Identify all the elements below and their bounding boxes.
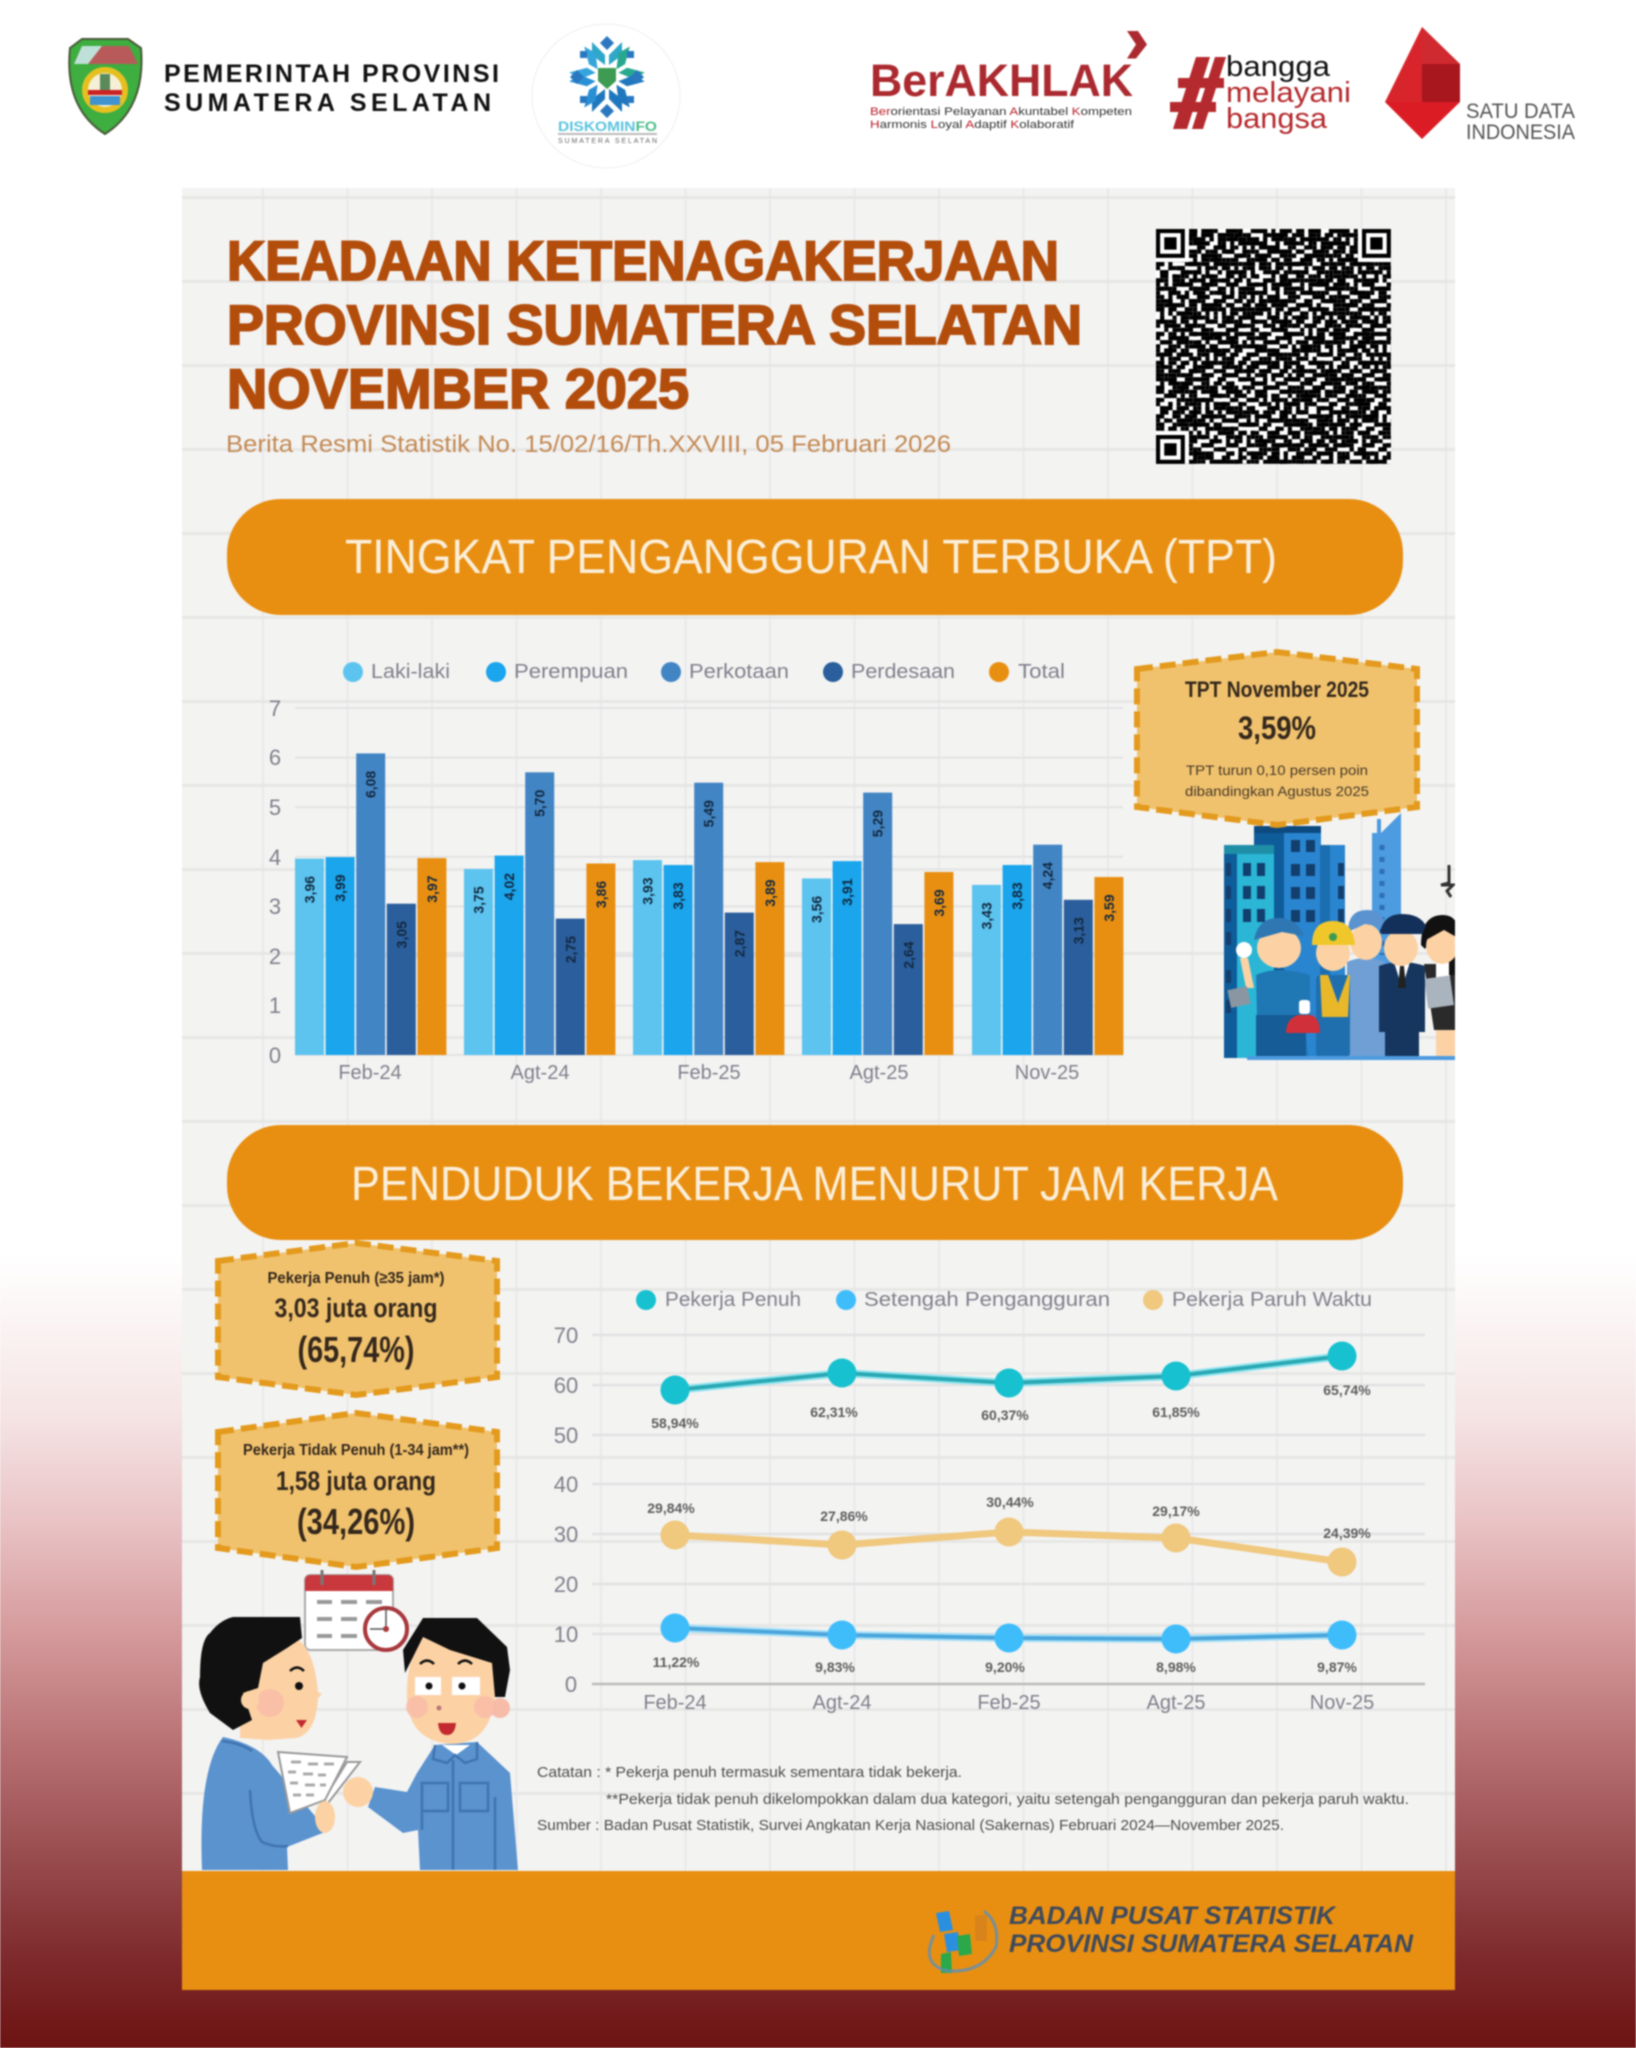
logo: Pemerintah Provinsi Sumatera Selatan: PEMERINTAH PROVINSI	[164, 60, 499, 88]
y axis labels: 6	[269, 745, 281, 770]
y axis labels: 7	[269, 696, 281, 721]
x axis labels: Feb-24	[338, 1062, 402, 1084]
notes and source: Sumber : Badan Pusat Statistik, Survei Angkatan Kerja Nasional (Sakernas) Februari 2024—November 2025.	[537, 1817, 1284, 1834]
logo: Pemerintah Provinsi Sumatera Selatan: SUMATERA SELATAN	[164, 89, 491, 117]
y axis labels: 5	[269, 795, 281, 820]
bar value labels: 3,96	[302, 876, 318, 903]
illustration: city and workers	[1224, 813, 1461, 1060]
bar value labels: 3,83	[670, 882, 686, 910]
bar value labels: 5,70	[532, 789, 548, 817]
line chart y axis: 30	[554, 1522, 578, 1547]
line chart legend	[636, 1289, 1372, 1311]
y axis labels: 3	[269, 894, 281, 919]
title: KEADAAN KETENAGAKERJAAN	[227, 229, 1059, 292]
line chart y axis: 70	[554, 1323, 578, 1348]
bar value labels: 2,64	[900, 941, 916, 969]
bar value labels: 3,69	[931, 889, 947, 917]
x axis labels: Nov-25	[1015, 1062, 1079, 1084]
line chart value labels: 11,22%	[653, 1654, 700, 1670]
buildings	[1224, 813, 1401, 1058]
x axis labels: Agt-24	[511, 1062, 569, 1084]
callout: TPT November 2025: TPT turun 0,10 persen poin	[1186, 762, 1368, 778]
footer band: PROVINSI SUMATERA SELATAN	[1009, 1930, 1414, 1958]
logo: Diskominfo: SUMATERA SELATAN	[558, 138, 657, 145]
footer band	[182, 1871, 1455, 1990]
panel: infographic sheet	[182, 188, 1455, 1872]
line chart legend: Setengah Pengangguran	[864, 1289, 1110, 1311]
bar chart legend	[343, 661, 1065, 683]
subtitle: Berita Resmi Statistik No. 15/02/16/Th.XXVIII, 05 Februari 2026	[226, 431, 951, 458]
callout: pekerja penuh: 3,03 juta orang	[274, 1293, 438, 1323]
callout: pekerja tidak penuh: 1,58 juta orang	[276, 1466, 436, 1496]
callout: TPT November 2025: dibandingkan Agustus 2025	[1185, 783, 1369, 799]
worker: safety vest	[1312, 921, 1355, 1057]
line chart value labels: 24,39%	[1323, 1525, 1371, 1541]
callout: TPT November 2025: 3,59%	[1238, 710, 1316, 746]
logo: BerAKHLAK	[870, 31, 1147, 131]
callout: TPT November 2025	[1137, 652, 1417, 825]
line chart x axis: Agt-25	[1147, 1692, 1205, 1714]
logo: Satu Data Indonesia	[1385, 27, 1575, 144]
line chart x axis	[643, 1692, 1374, 1714]
x axis labels	[338, 1062, 1079, 1084]
bar value labels: 3,97	[424, 875, 440, 903]
bar chart legend: Laki-laki	[371, 661, 450, 683]
bar value labels: 5,29	[870, 810, 886, 837]
logo: BerAKHLAK: BerAKHLAK	[870, 55, 1133, 106]
left worker	[199, 1617, 360, 1870]
bar value labels: 4,24	[1040, 862, 1056, 889]
title: PROVINSI SUMATERA SELATAN	[227, 293, 1082, 356]
logo: Diskominfo: DISKOMIN FO	[558, 118, 657, 134]
line chart value labels: 62,31%	[810, 1404, 858, 1420]
line chart x axis: Feb-25	[977, 1692, 1041, 1714]
logo: Pemerintah Provinsi Sumatera Selatan	[49, 32, 499, 144]
illustration: calendar and clock	[305, 1570, 407, 1650]
line chart value labels: 9,20%	[985, 1659, 1025, 1675]
bar value labels	[302, 771, 1117, 969]
callout: pekerja tidak penuh: Pekerja Tidak Penuh (1-34 jam**)	[243, 1442, 469, 1459]
bar value labels: 3,89	[762, 879, 778, 907]
right worker	[343, 1618, 518, 1870]
worker: overalls	[1347, 910, 1387, 1056]
line chart x axis: Nov-25	[1310, 1692, 1374, 1714]
series: Setengah Pengangguran	[660, 1614, 1356, 1654]
bar value labels: 3,99	[332, 874, 348, 902]
line chart value labels: 29,84%	[647, 1500, 695, 1516]
x axis labels: Agt-25	[850, 1062, 908, 1084]
bar value labels: 4,02	[501, 873, 517, 900]
worker: woman in suit	[1421, 915, 1461, 1056]
y axis labels: 0	[269, 1043, 281, 1068]
y axis labels: 1	[269, 993, 281, 1018]
line chart value labels	[647, 1382, 1371, 1675]
bar value labels: 3,43	[978, 902, 994, 930]
line chart value labels: 58,94%	[651, 1415, 699, 1431]
line chart value labels: 29,17%	[1152, 1503, 1200, 1519]
bar chart legend: Perempuan	[514, 661, 628, 683]
bar value labels: 2,87	[731, 930, 747, 957]
bar value labels: 3,93	[640, 877, 656, 905]
y axis labels: 2	[269, 944, 281, 969]
bar value labels: 3,83	[1009, 882, 1025, 910]
logo: bangga melayani bangsa: melayani	[1226, 77, 1351, 109]
line chart value labels: 61,85%	[1152, 1404, 1200, 1420]
line chart value labels: 27,86%	[820, 1508, 868, 1524]
bar value labels: 3,56	[808, 896, 824, 923]
callout: pekerja penuh	[218, 1243, 497, 1395]
series: Pekerja Penuh	[660, 1342, 1356, 1404]
bar value labels: 5,49	[701, 800, 717, 827]
line chart value labels: 65,74%	[1323, 1382, 1371, 1398]
line chart value labels: 9,87%	[1317, 1659, 1357, 1675]
logo: BerAKHLAK: Ber orientasi Pelayanan Akuntabel Kompeten	[870, 106, 1132, 118]
logo: bangga melayani bangsa: bangga	[1226, 51, 1331, 83]
line chart value labels: 30,44%	[986, 1494, 1034, 1510]
x axis labels: Feb-25	[677, 1062, 741, 1084]
title: NOVEMBER 2025	[227, 357, 689, 420]
bar chart legend: Perdesaan	[851, 661, 955, 683]
callout: TPT November 2025: TPT November 2025	[1185, 677, 1369, 702]
line chart legend: Pekerja Paruh Waktu	[1172, 1289, 1372, 1311]
line chart y axis: 20	[554, 1572, 578, 1597]
bar value labels: 3,05	[393, 921, 409, 948]
bar value labels: 3,59	[1101, 894, 1117, 922]
line chart value labels: 8,98%	[1156, 1659, 1196, 1675]
worker: mechanic	[1227, 918, 1320, 1057]
heading pill: jam kerja: PENDUDUK BEKERJA MENURUT JAM KERJA	[351, 1158, 1278, 1211]
line chart y axis: 40	[554, 1472, 578, 1497]
worker: officer	[1379, 914, 1426, 1058]
logo: Satu Data Indonesia: SATU DATA	[1466, 100, 1575, 123]
logo: BerAKHLAK: Harmonis Loyal Adaptif Kolaboratif	[870, 119, 1075, 131]
bar chart legend: Perkotaan	[689, 661, 789, 683]
line chart y axis: 0	[565, 1672, 577, 1697]
heading pill: TPT	[227, 499, 1403, 615]
bar value labels: 3,91	[839, 878, 855, 906]
y axis labels	[269, 696, 281, 1068]
logo: Diskominfo	[532, 24, 680, 168]
callout: pekerja penuh: (65,74%)	[298, 1329, 414, 1370]
line chart value labels: 60,37%	[981, 1407, 1029, 1423]
bars	[295, 753, 1123, 1055]
bar value labels: 2,75	[562, 936, 578, 963]
line chart x axis: Agt-24	[813, 1692, 871, 1714]
line chart y axis: 60	[554, 1373, 578, 1398]
line chart y axis: 50	[554, 1423, 578, 1448]
y axis labels: 4	[269, 845, 281, 870]
illustration: two workers talking	[199, 1617, 518, 1870]
line chart y axis	[554, 1323, 578, 1697]
series: Pekerja Paruh Waktu	[660, 1518, 1356, 1576]
callout: pekerja penuh: Pekerja Penuh (≥35 jam*)	[268, 1270, 444, 1287]
heading pill: jam kerja	[227, 1125, 1403, 1240]
line chart: jam kerja	[554, 1289, 1425, 1714]
footer band: BADAN PUSAT STATISTIK	[1009, 1902, 1337, 1930]
notes and source	[537, 1764, 1409, 1834]
QR code	[1156, 229, 1391, 464]
bar chart: TPT	[269, 661, 1123, 1084]
header logos	[49, 24, 1575, 168]
callout: pekerja tidak penuh: (34,26%)	[297, 1501, 415, 1542]
heading pill: TPT: TINGKAT PENGANGGURAN TERBUKA (TPT)	[345, 531, 1277, 584]
notes and source: **Pekerja tidak penuh dikelompokkan dalam dua kategori, yaitu setengah pengangguran dan pekerja paruh waktu.	[606, 1791, 1409, 1808]
callout: pekerja tidak penuh	[218, 1413, 497, 1567]
line chart x axis: Feb-24	[643, 1692, 707, 1714]
logo: Satu Data Indonesia: INDONESIA	[1466, 121, 1575, 144]
bar chart legend: Total	[1018, 661, 1065, 683]
bar value labels: 3,86	[593, 881, 609, 908]
bar value labels: 3,13	[1070, 917, 1086, 944]
notes and source: Catatan : * Pekerja penuh termasuk sementara tidak bekerja.	[537, 1764, 962, 1781]
line chart legend: Pekerja Penuh	[665, 1289, 801, 1311]
bar value labels: 3,75	[470, 886, 486, 914]
logo: bangga melayani bangsa: bangsa	[1226, 103, 1328, 135]
title	[227, 229, 1082, 420]
logo: bangga melayani bangsa	[1170, 51, 1351, 135]
line chart y axis: 10	[554, 1622, 578, 1647]
logo: BPS	[929, 1911, 997, 1973]
bar value labels: 6,08	[363, 771, 379, 798]
line chart value labels: 9,83%	[815, 1659, 855, 1675]
